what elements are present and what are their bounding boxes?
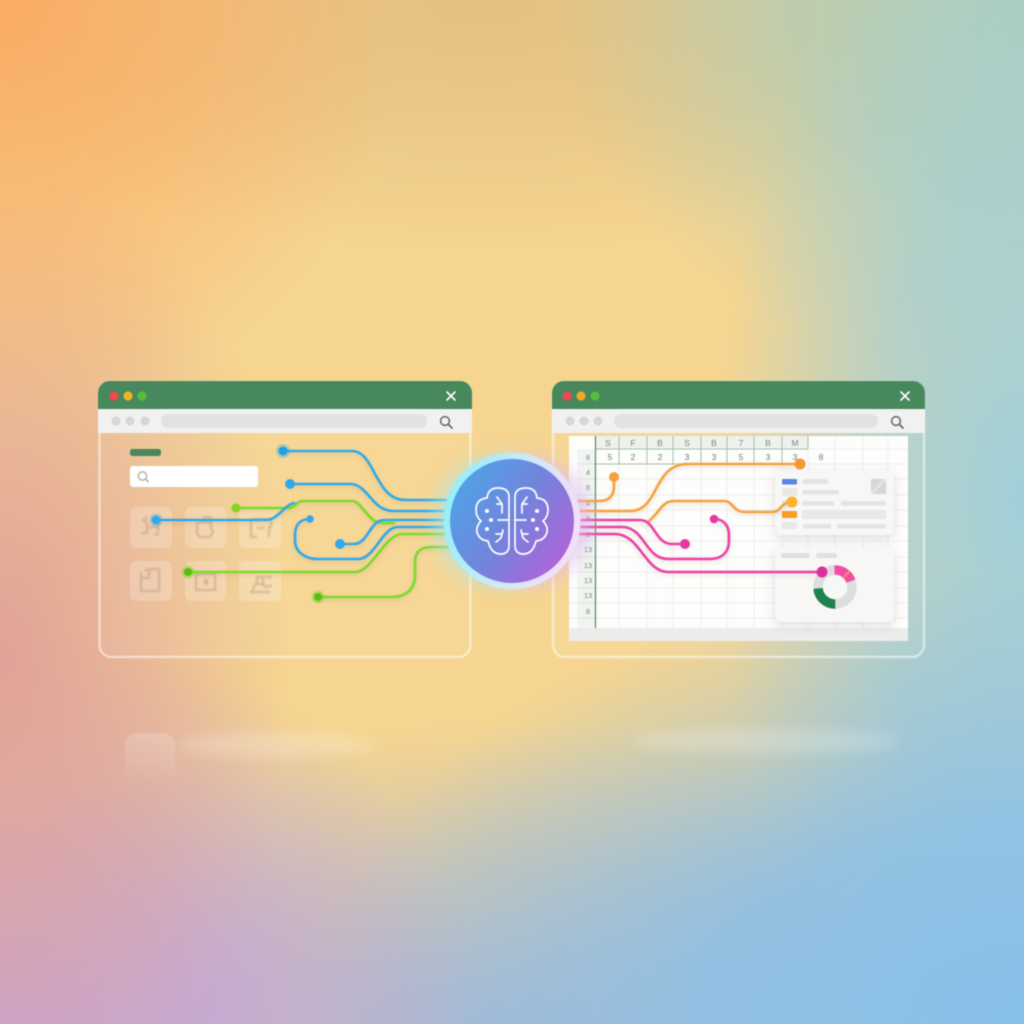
heading placeholder: [130, 449, 161, 456]
row headers: 13: [584, 591, 592, 600]
column headers: B: [765, 438, 771, 448]
connector lines: blue and green inputs: [156, 451, 450, 597]
connector nodes: outputs: [609, 458, 828, 578]
first data row: 8: [819, 452, 824, 462]
first data row: 3: [766, 452, 771, 462]
app icon grid: [130, 507, 281, 601]
panel: web page window: [98, 381, 472, 657]
first data row: 2: [631, 452, 636, 462]
donut chart: [818, 570, 852, 604]
first data row: 2: [658, 452, 663, 462]
first data row: 3: [685, 452, 690, 462]
hub ring: [444, 452, 580, 590]
window frame: [100, 382, 470, 657]
row headers: 6: [586, 453, 590, 462]
toolbar: [552, 409, 925, 433]
row headers: 4: [586, 468, 590, 477]
connector nodes: inputs: [150, 444, 345, 604]
reflection: left window: [125, 732, 375, 789]
row headers: 8: [586, 530, 590, 539]
card: data table: [775, 470, 894, 535]
title bar: [98, 381, 472, 409]
connector lines: orange and pink outputs: [575, 464, 822, 572]
hub glow: [434, 455, 590, 587]
spreadsheet: [569, 436, 908, 641]
reflection: right window: [630, 728, 900, 754]
toolbar: [98, 409, 472, 433]
first data row: 3: [793, 452, 798, 462]
window frame: [553, 382, 924, 657]
column headers: S: [605, 438, 611, 448]
column headers: 7: [739, 438, 744, 448]
row headers: 4: [586, 499, 590, 508]
row headers: 13: [584, 545, 592, 554]
row headers: 13: [584, 576, 592, 585]
first data row: 5: [608, 452, 613, 462]
AI hub: [434, 452, 590, 590]
column headers: B: [657, 438, 663, 448]
row headers: 8: [586, 607, 590, 616]
title bar: [552, 381, 925, 409]
hub core: [450, 459, 574, 583]
icon: brain: [476, 488, 548, 554]
first data row: 3: [712, 452, 717, 462]
panel: spreadsheet window: [552, 381, 925, 657]
first data row: 5: [739, 452, 744, 462]
column headers: [605, 438, 799, 448]
row headers: 8: [586, 483, 590, 492]
row headers: 13: [584, 561, 592, 570]
column headers: B: [711, 438, 717, 448]
column headers: S: [684, 438, 690, 448]
search box: [130, 466, 258, 487]
column headers: M: [791, 438, 799, 448]
row headers: [584, 453, 592, 616]
first data row: [608, 452, 824, 462]
card: donut chart: [775, 548, 894, 622]
row headers: 8: [586, 514, 590, 523]
column headers: F: [630, 438, 636, 448]
